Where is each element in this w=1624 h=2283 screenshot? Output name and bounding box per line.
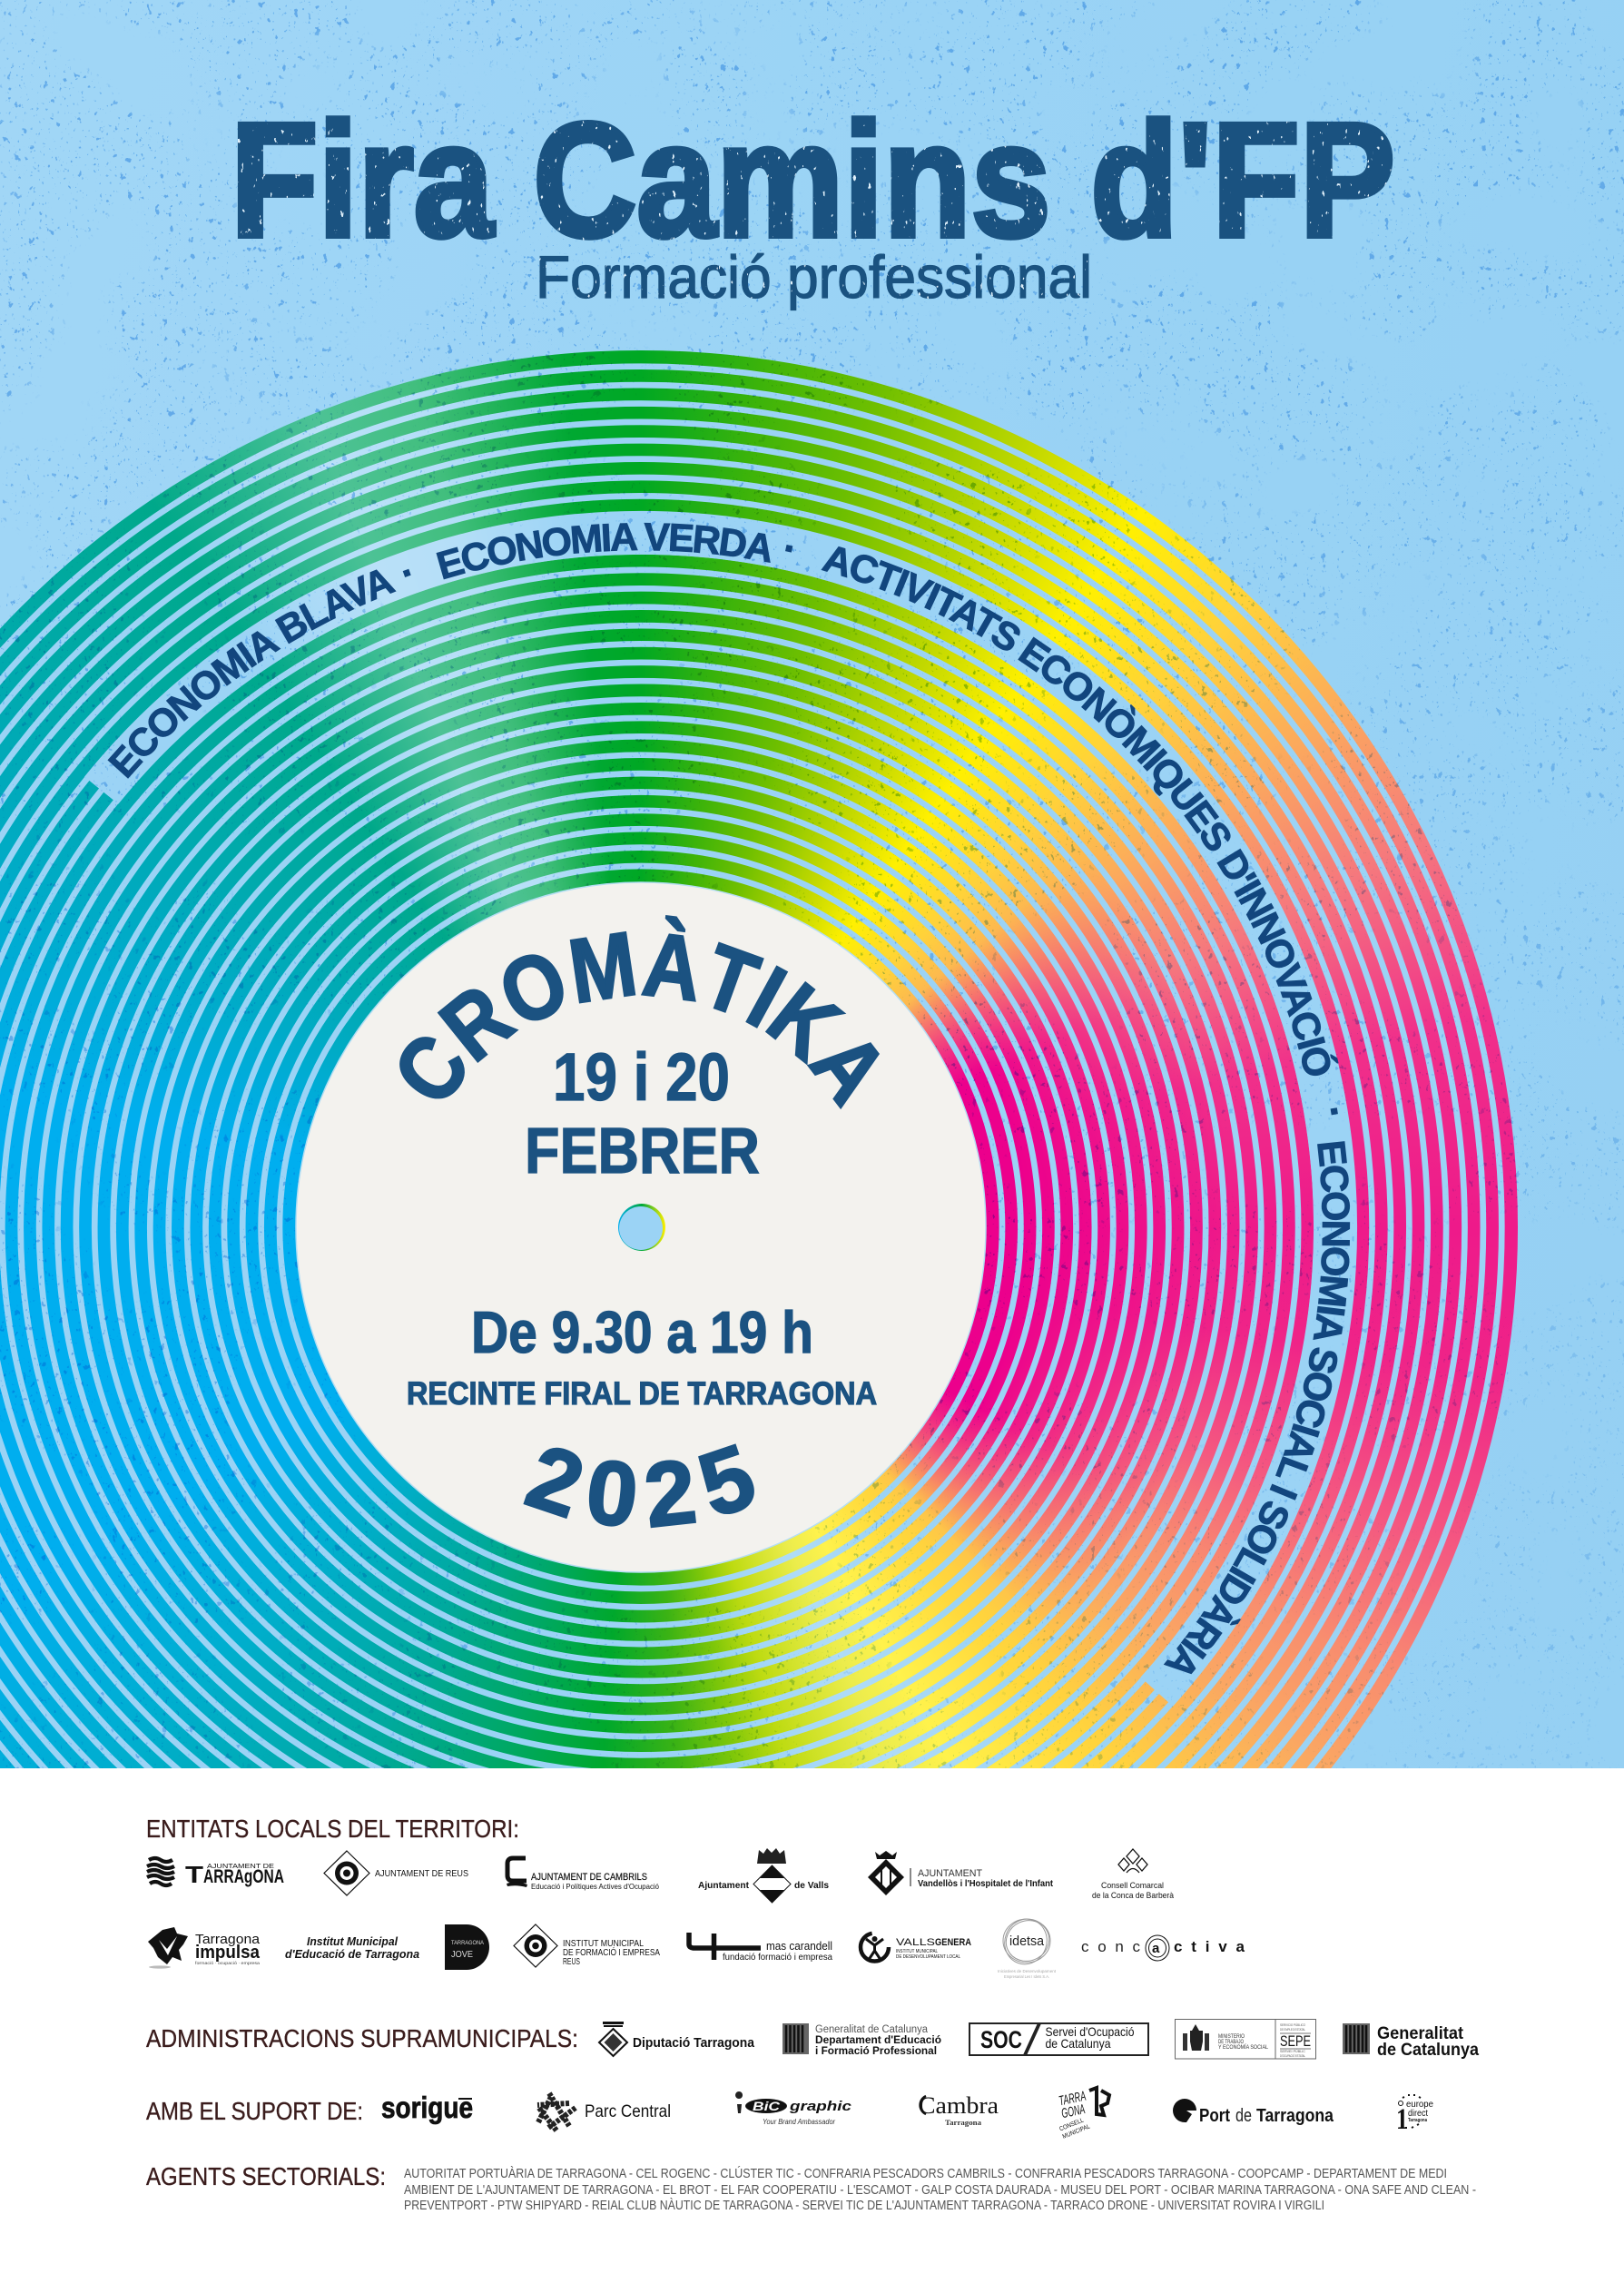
logo: Ministerio de Trabajo SEPE: Y ECONOMÍA SOCIAL	[1218, 2044, 1269, 2051]
logo: Departament d'Educació i Formació Professional	[782, 2023, 941, 2057]
logo: BiC graphic: graphic	[789, 2099, 852, 2114]
logo: Tarragona Consell Municipal de FP: GONA	[1060, 2101, 1087, 2121]
logo: Vandellòs i l'Hospitalet de l'Infant: Vandellòs i l'Hospitalet de l'Infant	[918, 1878, 1053, 1889]
logo: Tarragona Jove	[445, 1924, 489, 1970]
logo: Vandellòs i l'Hospitalet de l'Infant	[868, 1851, 1053, 1895]
logo: Valls Genera	[861, 1934, 971, 1961]
logo: Ministerio de Trabajo SEPE: SERVEI PÚBLIC	[1280, 2049, 1305, 2053]
logo: Valls Genera: INSTITUT MUNICIPAL	[896, 1949, 938, 1954]
logo: Concactiva	[1081, 1935, 1245, 1961]
title: Fira Camins d'FP	[231, 89, 1395, 271]
subtitle: Formació professional	[536, 243, 1092, 310]
vinyl record colour disc	[0, 350, 1518, 2104]
heading: sector agents: AGENTS SECTORIALS:	[146, 2162, 386, 2190]
logo: Mas Carandell: fundació formació i empresa	[723, 1952, 832, 1963]
logo: Vandellòs i l'Hospitalet de l'Infant: AJUNTAMENT	[918, 1868, 982, 1879]
curved sector text ring: ·	[779, 526, 801, 572]
logo: Consell Comarcal de la Conca de Barberà: de la Conca de Barberà	[1092, 1891, 1174, 1900]
logo: SOC Servei d'Ocupació de Catalunya: Servei d'Ocupació	[1046, 2024, 1135, 2039]
logo: Departament d'Educació i Formació Professional: Departament d'Educació	[815, 2035, 941, 2046]
logo: Institut Municipal de Formació i Empresa Reus: DE FORMACIÓ I EMPRESA	[563, 1946, 660, 1958]
venue: RECINTE FIRAL DE TARRAGONA	[407, 1376, 877, 1412]
inner magenta zone of the disc	[889, 902, 1184, 1589]
logo: Ministerio de Trabajo SEPE	[1175, 2019, 1316, 2059]
logo: Ministerio de Trabajo SEPE: SEPE	[1280, 2032, 1311, 2050]
logo: Concactiva: conc	[1081, 1938, 1140, 1955]
logo: Ministerio de Trabajo SEPE: DE TRABAJO	[1218, 2040, 1244, 2045]
logo: SOC Servei d'Ocupació de Catalunya: de Catalunya	[1046, 2036, 1111, 2051]
logo: Valls Genera: GENERA	[935, 1937, 971, 1948]
curved sector text ring: ·	[1312, 1103, 1356, 1123]
hero background panel	[0, 0, 1624, 1768]
logo: Generalitat de Catalunya	[1343, 2023, 1479, 2060]
logo: Concactiva: ctiva	[1174, 1938, 1245, 1955]
list of sector agents	[404, 2166, 1476, 2213]
logo: Ajuntament de Cambrils: Educació i Polítiques Actives d'Ocupació	[531, 1882, 659, 1891]
logo: Ministerio de Trabajo SEPE: SERVICIO PÚBLICO	[1280, 2022, 1305, 2027]
logo: Consell Comarcal de la Conca de Barberà: Consell Comarcal	[1101, 1881, 1164, 1890]
logo: BiC graphic	[735, 2091, 852, 2126]
logo: SOC Servei d'Ocupació de Catalunya: SOC	[980, 2026, 1022, 2053]
date: 19 i 20	[553, 1039, 730, 1115]
logo: Ministerio de Trabajo SEPE: MINISTERIO	[1218, 2034, 1245, 2040]
logo: Port de Tarragona: Port	[1199, 2106, 1230, 2126]
paper speckle texture	[0, 0, 1624, 1768]
logo: Tarragona Impulsa: impulsa	[195, 1943, 261, 1963]
logo: Ajuntament de Cambrils: AJUNTAMENT DE CAMBRILS	[531, 1872, 647, 1883]
logo: Consell Comarcal de la Conca de Barberà	[1092, 1849, 1174, 1900]
curved sector text ring: ·	[395, 550, 421, 595]
logo: Port de Tarragona: Tarragona	[1256, 2106, 1334, 2126]
logo: Institut Municipal d'Educació de Tarragona: d'Educació de Tarragona	[285, 1947, 419, 1961]
logo: Tarragona Consell Municipal de FP: MUNICIPAL	[1062, 2123, 1091, 2140]
curved sector text ring: ECONOMIA BLAVA	[107, 569, 396, 779]
logo: Parc Central: Parc Central	[585, 2102, 671, 2121]
logo: Ajuntament de Tarragona: T	[185, 1861, 203, 1888]
heading: supramunicipal administrations: ADMINISTRACIONS SUPRAMUNICIPALS:	[146, 2024, 578, 2052]
opening hours: De 9.30 a 19 h	[471, 1299, 813, 1365]
logo: Cambra Tarragona: Tarragona	[945, 2119, 981, 2127]
logo: Valls Genera: VALLS	[896, 1937, 935, 1948]
list of sector agents: AUTORITAT PORTUÀRIA DE TARRAGONA - CEL ROGENC - CLÚSTER TIC - CONFRARIA PESCADORS CAMBRILS - CONFRARIA PESCADORS TARRAGONA - COOPCAMP - DEPARTAMENT DE MEDI	[404, 2166, 1447, 2181]
logo: Sorigué: sorigue	[381, 2091, 473, 2124]
logo: Ajuntament de Valls: de Valls	[794, 1880, 829, 1891]
logo: Ajuntament de Cambrils	[507, 1858, 659, 1891]
logo: Port de Tarragona	[1173, 2099, 1334, 2126]
logo: Tarragona Impulsa	[148, 1927, 261, 1969]
logo: Departament d'Educació i Formació Professional: Generalitat de Catalunya	[815, 2024, 929, 2035]
curved sector text ring: ECONOMIA SOCIAL I SOLIDÀRIA	[1164, 1141, 1351, 1674]
curved sector text ring: ECONOMIA VERDA	[436, 523, 771, 579]
logo: Tarragona Impulsa: formació · ocupació · empresa	[195, 1961, 260, 1966]
logo: Diputació Tarragona: Diputació Tarragona	[633, 2035, 755, 2051]
logo: Idetsa: idetsa	[1009, 1934, 1045, 1949]
logo: Institut Municipal de Formació i Empresa Reus: INSTITUT MUNICIPAL	[563, 1939, 644, 1949]
logo: Ajuntament de Valls	[698, 1848, 829, 1903]
logo: Parc Central	[537, 2093, 671, 2130]
logo: Tarragona Impulsa: Tarragona	[195, 1932, 261, 1947]
logo: Tarragona Consell Municipal de FP	[1058, 2088, 1109, 2140]
logo: Tarragona Jove: TARRAGONA	[451, 1940, 485, 1946]
logo: Departament d'Educació i Formació Professional: i Formació Professional	[815, 2046, 937, 2057]
logo: Tarragona Consell Municipal de FP: CONSELL	[1058, 2117, 1085, 2132]
logo: Mas Carandell	[689, 1933, 832, 1963]
logo: Mas Carandell: mas carandell	[766, 1939, 832, 1953]
logo: Concactiva: a	[1152, 1941, 1160, 1956]
logo: SOC Servei d'Ocupació de Catalunya	[969, 2023, 1148, 2055]
record spindle hole	[618, 1204, 665, 1251]
list of sector agents: AMBIENT DE L'AJUNTAMENT DE TARRAGONA - EL BROT - EL FAR COOPERATIU - L'ESCAMOT - GALP COSTA DAURADA - MUSEU DEL PORT - OCIBAR MARINA TARRAGONA - ONA SAFE AND CLEAN -	[404, 2183, 1476, 2198]
logo: Diputació Tarragona	[599, 2022, 755, 2056]
logo: Europe Direct Tarragona: Tarragona	[1408, 2118, 1427, 2123]
event name: Cromàtika: CROMÀTIKA	[399, 915, 880, 1109]
logo: Idetsa	[998, 1914, 1057, 1980]
vinyl record grooves	[0, 363, 1505, 1768]
record centre label	[296, 882, 986, 1572]
curved sector text ring: ACTIVITATS ECONÒMIQUES D'INNOVACIÓ	[821, 546, 1339, 1077]
logo: Institut Municipal de Formació i Empresa Reus: REUS	[563, 1957, 580, 1967]
logo: BiC graphic: BiC	[753, 2099, 781, 2113]
logo: Europe Direct Tarragona: europe	[1406, 2100, 1433, 2110]
logo: Ajuntament de Tarragona: ARRAgONA	[203, 1866, 284, 1887]
logo: Valls Genera: DE DESENVOLUPAMENT LOCAL	[896, 1954, 960, 1960]
heading: with the support of: AMB EL SUPORT DE:	[146, 2097, 363, 2125]
logo: Tarragona Consell Municipal de FP: TARRA	[1058, 2089, 1088, 2109]
logo: Idetsa: Iniciatives de Desenvolupament	[998, 1969, 1057, 1974]
logo: Ajuntament de Reus	[324, 1851, 468, 1895]
record light sheen	[0, 350, 1518, 2104]
logo: Ministerio de Trabajo SEPE: DE EMPLEO ESTATAL	[1280, 2027, 1306, 2032]
logo: Generalitat de Catalunya: de Catalunya	[1377, 2041, 1479, 2060]
logo: Generalitat de Catalunya: Generalitat	[1377, 2024, 1464, 2043]
logo: Institut Municipal de Formació i Empresa Reus	[514, 1924, 660, 1967]
list of sector agents: PREVENTPORT - PTW SHIPYARD - REIAL CLUB NÀUTIC DE TARRAGONA - SERVEI TIC DE L'AJUNTAMENT TARRAGONA - TARRACO DRONE - UNIVERSITAT ROVIRA I VIRGILI	[404, 2198, 1324, 2213]
heading: local entities: ENTITATS LOCALS DEL TERRITORI:	[146, 1815, 519, 1843]
logo: Ajuntament de Reus: AJUNTAMENT DE REUS	[375, 1868, 468, 1879]
curved sector text ring	[107, 523, 1356, 1674]
logo: Ajuntament de Tarragona	[147, 1858, 284, 1888]
year: 2025	[523, 1443, 754, 1529]
logo: Institut Municipal d'Educació de Tarragona: Institut Municipal	[307, 1934, 398, 1948]
logo: Ministerio de Trabajo SEPE: D'OCUPACIÓ ESTATAL	[1280, 2053, 1306, 2058]
logo: Tarragona Jove: JOVE	[451, 1950, 473, 1960]
logo: BiC graphic: Your Brand Ambassador	[763, 2118, 835, 2126]
logo: Ajuntament de Valls: Ajuntament	[698, 1880, 749, 1891]
logo: Port de Tarragona: de	[1235, 2106, 1252, 2126]
logo: Europe Direct Tarragona: 1	[1396, 2103, 1408, 2136]
logo: Cambra Tarragona: Cambra	[919, 2092, 999, 2119]
logo: Idetsa: Empresarial Les I Idets S.A.	[1004, 1974, 1049, 1980]
month: FEBRER	[525, 1116, 760, 1187]
logo: Institut Municipal d'Educació de Tarragona	[285, 1934, 419, 1961]
logo: Europe Direct Tarragona: direct	[1408, 2109, 1428, 2119]
logo: Europe Direct Tarragona	[1396, 2095, 1433, 2136]
logo: Ajuntament de Tarragona: AJUNTAMENT DE	[207, 1862, 274, 1870]
